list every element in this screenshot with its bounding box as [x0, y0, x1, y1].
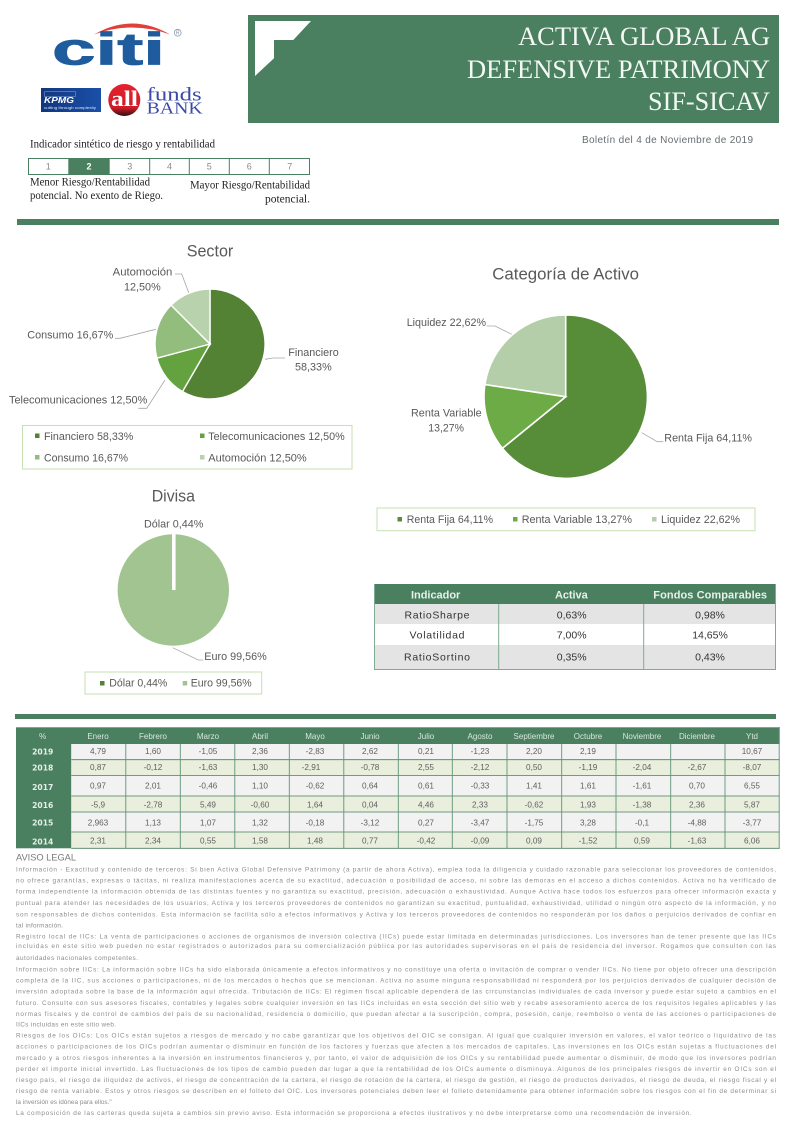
table: monthly returns: -3,12 — [361, 818, 380, 828]
table: monthly returns: 0,50 — [526, 763, 542, 772]
table: monthly returns: 0,64 — [362, 782, 378, 790]
table: monthly returns: -0,78 — [361, 763, 380, 772]
legal notice: no ofrece garantías, expresas o tácitas, ni realiza manifestaciones acerca de su exactitud, adecuación o posibilidad de acceso, ni sobre las demoras en el acceso a dichos contenidos. Activa no ha verificado de — [16, 878, 776, 884]
chart: Categoría de Activo pie: 13,27% — [428, 423, 464, 435]
risk indicator: 6 — [247, 162, 252, 172]
chart: Categoría de Activo pie: Liquidez 22,62% — [407, 317, 486, 329]
risk indicator: 4 — [167, 162, 172, 172]
legal notice: riesgo de renta variable. Estos y otros riesgos se describen en el folleto del OIC. Los inversores potenciales deben leer el folleto detenidamente para obtener información sobre los riesgos con el fin de determinar si — [16, 1088, 776, 1095]
table: monthly returns: -8,07 — [743, 763, 762, 772]
table: monthly returns: 2,31 — [90, 836, 106, 846]
table: monthly returns: -0,46 — [199, 782, 218, 790]
table: monthly returns: 0,59 — [634, 836, 650, 846]
table: monthly returns: 2,36 — [689, 800, 705, 810]
table: monthly returns: Abril — [252, 732, 268, 741]
table: indicators: Indicador — [411, 590, 461, 602]
table: monthly returns: 1,93 — [580, 800, 596, 810]
logo: Allfunds Bank — [108, 84, 204, 117]
risk indicator: Menor Riesgo/Rentabilidad — [30, 177, 150, 189]
legal notice: inversión adoptada sobre la base de la información aquí ofrecida. Tributación de IICs: El régimen fiscal aplicable dependerá de las circunstancias individuales de cada inversor y puede estar sujeto a cambios en el — [16, 988, 776, 996]
legal notice: son responsables de dichos contenidos. Esta información se facilita sólo a efectos informativos y Activa y los terceros proveedores de contenidos no responderán por los daños o perjuicios derivados de confiar en — [16, 912, 776, 918]
legal notice: riesgo país, el riesgo de iliquidez de activos, el riesgo de concentración de la cartera, el riesgo de rotación de la cartera, el riesgo de gestión, el riesgo de productos derivados, el riesgo de deuda, el riesgo fiscal y el — [16, 1077, 776, 1084]
table: monthly returns: -2,83 — [306, 747, 325, 756]
title banner — [248, 15, 779, 123]
legend: Sector: Telecomunicaciones 12,50% — [208, 431, 345, 443]
table: indicators: 0,35% — [557, 652, 587, 664]
logo: Citi: citi — [52, 24, 165, 74]
table: monthly returns: 0,27 — [418, 818, 434, 828]
table: indicators: 14,65% — [692, 630, 728, 642]
table: indicators: RatioSharpe — [404, 610, 470, 622]
table: monthly returns: 0,77 — [362, 836, 378, 846]
risk indicator: 2 — [86, 162, 92, 172]
chart: Divisa pie: Dólar 0,44% — [144, 519, 204, 531]
table: monthly returns: 6,06 — [744, 836, 760, 846]
table: monthly returns: -2,12 — [471, 763, 490, 772]
table: monthly returns: 4,46 — [418, 800, 434, 810]
table: monthly returns: 1,48 — [307, 836, 323, 846]
table: monthly returns: 0,87 — [90, 763, 106, 772]
table: monthly returns: -2,67 — [688, 763, 707, 772]
risk indicator: Mayor Riesgo/Rentabilidad — [190, 179, 310, 191]
title banner: ACTIVA GLOBAL AG — [518, 21, 770, 51]
table: monthly returns: 1,61 — [580, 782, 596, 790]
icon: white corner logo — [255, 21, 311, 76]
table: monthly returns: 1,60 — [145, 747, 161, 756]
table: monthly returns: 2,55 — [418, 763, 434, 772]
table: monthly returns: -0,42 — [417, 836, 436, 846]
table: monthly returns: -1,63 — [688, 836, 707, 846]
table: indicators: 7,00% — [557, 630, 587, 642]
table: monthly returns: Diciembre — [679, 732, 716, 741]
table: indicators: 0,63% — [557, 610, 587, 622]
risk indicator: 5 — [207, 162, 212, 172]
legal notice: tal información. — [16, 922, 63, 930]
table: monthly returns: 5,87 — [744, 800, 760, 810]
table: monthly returns: 1,30 — [252, 763, 268, 772]
chart: Divisa pie: Divisa — [152, 487, 195, 506]
risk indicator: potencial. — [265, 193, 310, 205]
logo: Allfunds Bank: funds — [147, 85, 202, 106]
legend: Categoría de Activo: Renta Variable 13,27% — [522, 514, 632, 526]
legend: Divisa: Euro 99,56% — [191, 678, 252, 690]
table: monthly returns: 3,28 — [580, 818, 596, 828]
chart: Divisa pie: Euro 99,56% — [204, 651, 267, 663]
table: indicators — [374, 584, 776, 670]
legend: Categoría de Activo: Liquidez 22,62% — [661, 514, 740, 526]
table: monthly returns: -1,38 — [633, 800, 652, 810]
legal notice: IICs incluidas en este sitio web. — [16, 1022, 116, 1028]
legal notice: Información - Exactitud y contenido de terceros: Si bien Activa Global Defensive Patrimony (a partir de ahora Activa), emplea toda la diligencia y cuidado razonable para seleccionar los proveedores de contenidos, — [16, 866, 776, 874]
table: monthly returns: -2,04 — [633, 763, 652, 772]
legend: Divisa — [85, 672, 262, 694]
table: monthly returns: 2,33 — [472, 800, 488, 810]
legend: Sector: Automoción 12,50% — [208, 453, 307, 465]
legal notice: futuro. Consulte con sus asesores fiscales, contables y legales sobre cualquier inversión en las IICs incluidas en esta sección del sitio web y recabe asesoramiento acerca de los requisitos legales aplicables y las — [16, 1000, 776, 1007]
table: monthly returns: 4,79 — [90, 747, 106, 756]
table: monthly returns: 2,01 — [145, 782, 161, 790]
table: monthly returns: 2019 — [32, 748, 53, 757]
chart: Categoría de Activo pie: Renta Variable — [411, 408, 482, 420]
chart: Sector pie: Telecomunicaciones 12,50% — [9, 394, 148, 406]
table: monthly returns: 10,67 — [742, 747, 763, 756]
risk indicator: Indicador sintético de riesgo y rentabilidad — [30, 139, 215, 151]
legal notice: normas fiscales y de control de cambios del país de su nacionalidad, residencia o domicilio, que puedan afectar a la suscripción, compra, posesión, canje, reembolso o venta de las acciones o participaciones de — [16, 1011, 776, 1018]
table: monthly returns: 1,58 — [252, 836, 268, 846]
chart: Categoría de Activo pie: Renta Fija 64,11% — [664, 433, 752, 445]
title banner: DEFENSIVE PATRIMONY — [467, 54, 770, 84]
chart: Sector pie: 58,33% — [295, 362, 332, 374]
table: monthly returns: 2017 — [32, 783, 53, 792]
table: monthly returns: 2,62 — [362, 747, 378, 756]
logo: Citi: R — [176, 31, 180, 37]
table: monthly returns: -2,78 — [144, 800, 163, 810]
logo: KPMG: cutting through complexity — [44, 106, 96, 110]
table: monthly returns: 1,32 — [252, 818, 268, 828]
legal notice: AVISO LEGAL — [16, 853, 76, 863]
legal notice: Información sobre IICs: La información sobre IICs ha sido elaborada únicamente a efectos informativos y no constituye una oferta o invitación de comprar o vender IICs. No tiene por objeto ofrecer una descripción — [16, 966, 776, 974]
table: monthly returns: -0,1 — [635, 818, 650, 828]
risk indicator: 7 — [287, 162, 292, 172]
table: monthly returns: 2,20 — [526, 747, 542, 756]
table: monthly returns: -0,12 — [144, 763, 163, 772]
table: monthly returns: Febrero — [139, 732, 168, 741]
table: indicators: RatioSortino — [404, 652, 470, 664]
table: monthly returns: 2,19 — [580, 747, 596, 756]
table: monthly returns: -1,75 — [525, 818, 544, 828]
logo: Citi — [52, 24, 181, 74]
table: monthly returns: Junio — [360, 732, 380, 741]
table: monthly returns: 1,41 — [526, 782, 542, 790]
legal notice: completa de la IIC, sus acciones o participaciones, ni de los mercados o hechos que se mencionan. Activa no asume ninguna responsabilidad ni responderá por los perjuicios derivados de cualquier decisión de — [16, 978, 776, 984]
legend: Sector — [22, 426, 352, 469]
legend: Categoría de Activo — [377, 508, 755, 531]
table: monthly returns: -3,47 — [471, 818, 490, 828]
table: monthly returns: 0,55 — [200, 836, 216, 846]
table: monthly returns: -1,63 — [199, 763, 218, 772]
table: monthly returns: 0,21 — [418, 747, 434, 756]
table: monthly returns: -1,05 — [199, 747, 218, 756]
legend: Sector: Financiero 58,33% — [44, 431, 134, 443]
legal notice: Riesgos de los OICs: Los OICs están sujetos a riesgos de mercado y no cabe garantizar que los objetivos del OIC se consigan. Al igual que cualquier inversión en valores, el valor teórico o liquidativo de las — [16, 1032, 776, 1040]
legal notice: mercado y a otros riesgos inherentes a la inversión en instrumentos financieros y, por tanto, el valor de adquisición de los OICs y su rentabilidad puede aumentar o disminuir, de modo que los inversores podrían — [16, 1055, 776, 1062]
table: monthly returns: 1,07 — [200, 818, 216, 828]
chart: Sector pie — [9, 242, 339, 408]
table: indicators: 0,98% — [695, 610, 725, 622]
table: monthly returns: 6,55 — [744, 782, 760, 790]
table: monthly returns: 2016 — [32, 801, 53, 810]
logo: KPMG — [41, 88, 101, 112]
table: monthly returns: Julio — [418, 732, 435, 741]
table: monthly returns: Octubre — [574, 732, 603, 741]
table: monthly returns: 0,70 — [689, 782, 705, 790]
table: monthly returns: -5,9 — [91, 800, 106, 810]
logo: Allfunds Bank: all — [111, 86, 138, 111]
table: monthly returns: -1,19 — [579, 763, 598, 772]
table: monthly returns: -0,62 — [525, 800, 544, 810]
legend: Categoría de Activo: Renta Fija 64,11% — [407, 514, 493, 526]
table: monthly returns: 0,09 — [526, 836, 542, 846]
table: monthly returns: 5,49 — [200, 800, 216, 810]
table: monthly returns: 2015 — [32, 819, 53, 828]
table: monthly returns: Ytd — [746, 732, 758, 741]
divider top — [17, 219, 779, 225]
table: monthly returns: -2,91 — [302, 763, 321, 772]
risk indicator: 3 — [127, 162, 132, 172]
table: monthly returns: 1,64 — [307, 800, 323, 810]
table: indicators: Volatilidad — [410, 630, 465, 642]
risk indicator — [28, 139, 310, 205]
logo: KPMG: KPMG — [44, 95, 74, 105]
legal notice — [16, 853, 777, 1117]
table: monthly returns: 2018 — [32, 764, 53, 773]
legal notice: acciones o participaciones de los OICs podrían aumentar o disminuir en función de los factores y fuerzas que afecten a los mercados de capitales. Las inversiones en los OICs están sujetas a fluctuaciones del — [16, 1044, 776, 1050]
table: monthly returns: Septiembre — [514, 732, 555, 741]
table: monthly returns: -0,09 — [471, 836, 490, 846]
chart: Sector pie: Automoción — [113, 267, 172, 279]
legend: Divisa: Dólar 0,44% — [109, 678, 167, 690]
table: monthly returns: -1,23 — [471, 747, 490, 756]
table: monthly returns: 0,61 — [418, 782, 434, 790]
table: monthly returns: 1,10 — [252, 782, 268, 790]
table: monthly returns: 1,13 — [145, 818, 161, 828]
table: monthly returns: Mayo — [305, 732, 325, 741]
table: monthly returns: 2,36 — [252, 747, 268, 756]
risk indicator: 1 — [46, 162, 51, 172]
chart: Divisa pie — [118, 487, 267, 663]
table: monthly returns — [16, 727, 780, 848]
table: monthly returns: -1,52 — [579, 836, 598, 846]
logo: Allfunds Bank: BANK — [147, 98, 204, 117]
title banner: SIF-SICAV — [648, 86, 770, 116]
table: indicators: 0,43% — [695, 652, 725, 664]
table: monthly returns: % — [39, 732, 46, 741]
chart: Sector pie: Financiero — [288, 347, 339, 359]
table: monthly returns: Marzo — [197, 732, 220, 741]
legal notice: puntual para atender las necesidades de los usuarios, Activa y los terceros proveedores de contenidos no garantizan su exactitud, puntualidad, exhaustividad, utilidad o ningún otro aspecto de la información, y no — [16, 900, 776, 907]
divider middle — [15, 714, 776, 719]
legal notice: la inversión es idónea para ellos." — [16, 1099, 112, 1106]
legal notice: incluidas en este sitio web pueden no estar registrados o autorizados para su comercialización pública por las autoridades supervisoras en el país de residencia del inversor. Rogamos que consulten con las — [16, 943, 776, 950]
risk indicator: potencial. No exento de Riego. — [30, 190, 163, 202]
legend: Sector: Consumo 16,67% — [44, 453, 128, 465]
chart: Categoría de Activo pie: Categoría de Activo — [492, 264, 639, 283]
chart: Categoría de Activo pie — [407, 264, 752, 478]
chart: Sector pie: 12,50% — [124, 282, 161, 294]
table: indicators: Fondos Comparables — [653, 590, 767, 602]
date line: Boletín del 4 de Noviembre de 2019 — [582, 135, 753, 146]
table: monthly returns: -0,33 — [471, 782, 490, 790]
legal notice: Registro local de IICs: La venta de participaciones o acciones de organismos de inversión colectiva (IICs) puede estar limitada en determinadas jurisdicciones. Los inversores han de tener presente que las IICs — [16, 934, 776, 940]
chart: Sector pie: Consumo 16,67% — [27, 329, 114, 341]
legal notice: autoridades nacionales competentes. — [16, 955, 138, 962]
legal notice: perder el importe inicial invertido. Las fluctuaciones de los tipos de cambio pueden dar lugar a que la rentabilidad de los OICs aumente o disminuya. Algunos de los principales riesgos de invertir en OICs son el — [16, 1066, 776, 1073]
table: indicators: Activa — [555, 590, 589, 602]
table: monthly returns: -0,18 — [306, 818, 325, 828]
table: monthly returns: Enero — [87, 732, 109, 741]
table: monthly returns: -0,62 — [306, 782, 325, 790]
table: monthly returns: -3,77 — [743, 818, 762, 828]
legal notice: forma independiente la información obtenida de las distintas fuentes y no garantiza su exactitud, precisión, adecuación o exhaustividad. Aunque Activa hace todos los esfuerzos para ofrecer información exacta y — [16, 888, 777, 896]
table: monthly returns: 2,963 — [88, 818, 109, 828]
table: monthly returns: -0,60 — [251, 800, 270, 810]
table: monthly returns: -4,88 — [688, 818, 707, 828]
table: monthly returns: Agosto — [468, 732, 493, 741]
table: monthly returns: 0,97 — [90, 782, 106, 790]
table: monthly returns: 2,34 — [145, 836, 161, 846]
table: monthly returns: 0,04 — [362, 800, 378, 810]
table: monthly returns: Noviembre — [623, 732, 662, 741]
table: monthly returns: -1,61 — [633, 782, 652, 790]
table: monthly returns: 2014 — [32, 837, 53, 846]
chart: Sector pie: Sector — [187, 242, 234, 261]
legal notice: La composición de las carteras queda sujeta a cambios sin previo aviso. Esta información se proporciona a efectos ilustrativos y no debe interpretarse como una recomendación de inversión. — [16, 1110, 692, 1117]
